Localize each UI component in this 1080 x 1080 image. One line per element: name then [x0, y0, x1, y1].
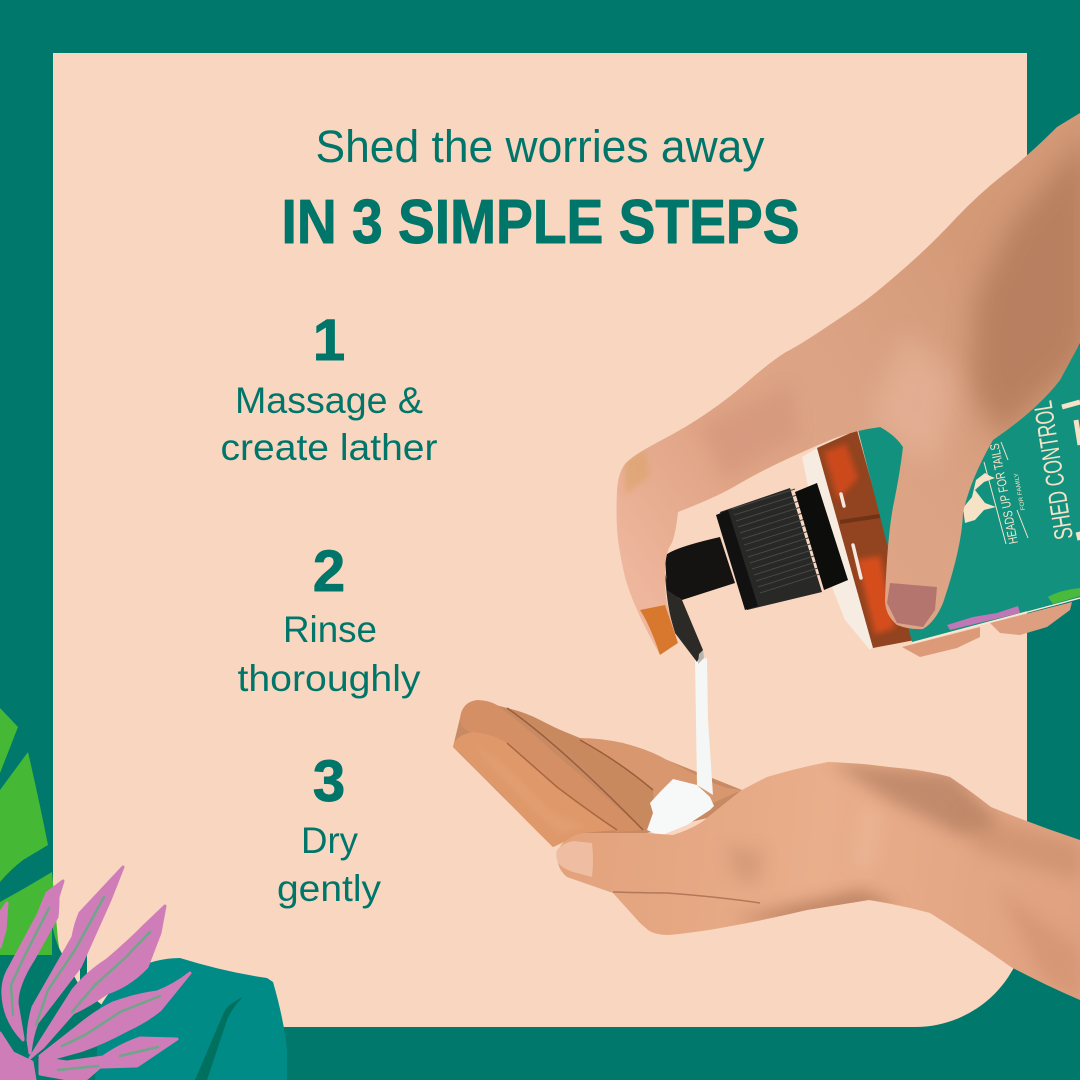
- step 2: [238, 539, 421, 699]
- lower hand palm: [556, 762, 1080, 1000]
- amber bottle shoulder: [817, 430, 915, 648]
- step 2: thoroughly: [238, 658, 421, 699]
- title: IN 3 SIMPLE STEPS: [282, 188, 800, 257]
- label text: SHED CONTROL: [1027, 399, 1079, 542]
- product stream: [695, 658, 713, 795]
- icon: finger nail: [887, 583, 937, 627]
- title: Shed the worries away: [316, 121, 765, 172]
- step 3: gently: [277, 868, 382, 909]
- step 1: create lather: [220, 427, 438, 468]
- step 1: 1: [313, 308, 345, 373]
- title: [282, 121, 800, 257]
- nozzle stem: [665, 537, 735, 600]
- step 2: 2: [313, 539, 345, 604]
- icon: brand horse mark: [963, 473, 996, 523]
- upper hand: [616, 113, 1080, 655]
- bottle white rim: [802, 448, 880, 650]
- bottle: FOR FAMILY: [1014, 472, 1027, 511]
- step 3: [277, 749, 382, 909]
- icon: thumb nail: [556, 841, 593, 877]
- foam: [647, 779, 714, 836]
- lower hand fingers: [453, 700, 742, 847]
- spout: [665, 573, 703, 662]
- tropical leaves: [0, 708, 287, 1080]
- step 3: Dry: [301, 820, 358, 861]
- bottle label: [858, 345, 1080, 642]
- knurled cap: [720, 488, 822, 610]
- step 1: Massage &: [235, 380, 423, 421]
- fingers behind bottle: [902, 602, 1072, 657]
- bottle: [802, 345, 1080, 650]
- step 2: Rinse: [283, 609, 377, 650]
- step 3: 3: [313, 749, 345, 814]
- pump: [665, 483, 848, 664]
- step 1: [220, 308, 438, 468]
- collar: [795, 483, 848, 590]
- bottle: HEADS UP FOR TAILS: [987, 442, 1021, 545]
